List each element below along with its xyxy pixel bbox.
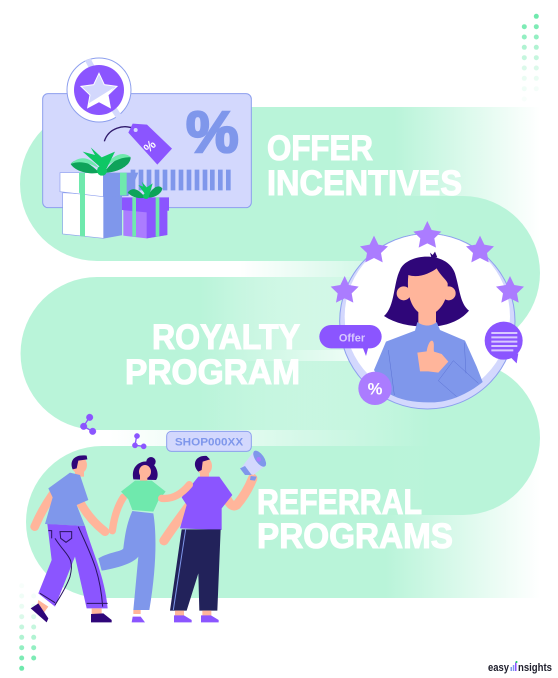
chat bubble with lines xyxy=(485,322,523,363)
offer speech bubble xyxy=(319,325,382,356)
large gift box xyxy=(60,147,138,238)
logo: easy insights xyxy=(488,661,552,674)
band 3 xyxy=(21,277,400,430)
coupon code label: SHOP000XX xyxy=(175,437,244,449)
icon: share network 1 xyxy=(80,414,96,435)
decorative dots bottom left xyxy=(19,583,36,671)
icon: price tag xyxy=(128,124,172,165)
heading: offer incentives: OFFER xyxy=(267,129,373,168)
band 4 xyxy=(110,361,540,515)
percent badge xyxy=(358,372,392,405)
heading: referral programs: REFERRAL xyxy=(257,483,422,522)
offer speech bubble: Offer xyxy=(339,333,366,345)
man right xyxy=(164,449,269,622)
coupon card xyxy=(43,94,251,208)
percent badge: % xyxy=(368,379,383,398)
icon: megaphone xyxy=(240,449,269,481)
heading: royalty program: PROGRAM xyxy=(125,353,300,392)
illustration: coupon and gifts xyxy=(43,58,251,238)
icon: share network 2 xyxy=(132,433,146,449)
woman figure xyxy=(374,252,483,402)
barcode xyxy=(131,170,231,190)
decorative dots top right xyxy=(522,14,539,101)
small gift box xyxy=(122,182,169,238)
tag string xyxy=(104,127,136,141)
thumbs up hand xyxy=(417,341,448,373)
heading: referral programs: PROGRAMS xyxy=(257,517,453,556)
illustration: three people referral xyxy=(31,414,269,622)
band 1 xyxy=(20,107,540,261)
big percent sign: % xyxy=(186,100,239,165)
stars xyxy=(331,221,524,303)
woman middle xyxy=(98,457,166,622)
heading: royalty program: ROYALTY xyxy=(152,318,300,357)
logo: easy insights: nsights xyxy=(518,662,552,674)
band 5 xyxy=(26,446,540,598)
logo: easy insights: easy xyxy=(488,662,510,674)
woman forearm reaching over man's shoulder xyxy=(162,485,189,498)
illustration: woman with ratings xyxy=(319,221,524,409)
icon: price tag: % xyxy=(141,138,159,155)
band 2 xyxy=(240,196,540,350)
coupon code label xyxy=(167,431,251,451)
heading: offer incentives: INCENTIVES xyxy=(267,164,462,203)
inner circle xyxy=(345,234,510,399)
icon: star medal xyxy=(67,58,131,122)
man left xyxy=(31,455,112,622)
ring xyxy=(340,234,515,409)
background bands xyxy=(20,107,540,598)
